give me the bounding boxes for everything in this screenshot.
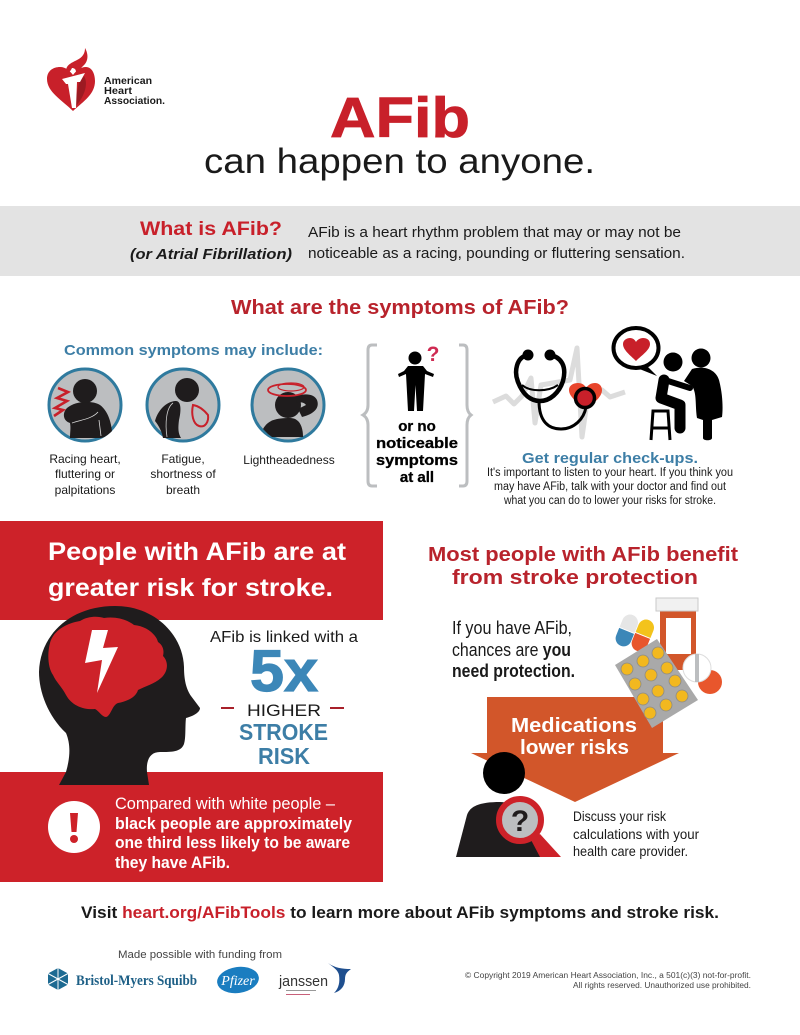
panel: awareness callout: they have AFib. bbox=[115, 853, 230, 872]
copyright: All rights reserved. Unauthorized use prohibited. bbox=[573, 981, 751, 990]
arrow: medications lower risks: Medications bbox=[511, 715, 637, 737]
panel: stroke risk heading bbox=[0, 521, 383, 620]
logo: Pfizer bbox=[215, 964, 261, 996]
heading: symptoms: What are the symptoms of AFib? bbox=[231, 297, 569, 319]
symptom labels: Lightheadedness bbox=[243, 453, 335, 467]
icon: fatigue bbox=[147, 369, 219, 441]
check-ups text: It's important to listen to your heart. If you think you bbox=[487, 467, 733, 479]
symptom labels: palpitations bbox=[55, 483, 115, 497]
panel: no noticeable symptoms: or no bbox=[398, 418, 436, 435]
symptom labels: fluttering or bbox=[55, 467, 115, 481]
symptom labels bbox=[49, 452, 335, 497]
heading: common symptoms: Common symptoms may include: bbox=[64, 342, 323, 359]
icon: person with magnifier bbox=[456, 752, 561, 857]
logo: Bristol-Myers Squibb bbox=[48, 968, 197, 990]
check-ups text: what you can do to lower your risks for stroke. bbox=[503, 495, 716, 507]
panel: what is AFib: (or Atrial Fibrillation) bbox=[130, 246, 292, 263]
stat: 5x higher stroke risk: HIGHER bbox=[247, 701, 321, 720]
panel: awareness callout bbox=[0, 772, 383, 882]
logo: Janssen: janssen bbox=[278, 973, 328, 990]
stat: 5x higher stroke risk: RISK bbox=[258, 743, 310, 769]
panel: what is AFib: AFib is a heart rhythm problem that may or may not be bbox=[308, 224, 681, 241]
panel: what is AFib: What is AFib? bbox=[140, 219, 282, 240]
icon: racing heart bbox=[49, 369, 121, 441]
title bbox=[204, 86, 595, 181]
check-ups text: Get regular check-ups. bbox=[522, 450, 698, 467]
logo: American Heart Association bbox=[47, 48, 165, 111]
heading: stroke protection: Most people with AFib benefit bbox=[428, 544, 738, 566]
stat: 5x higher stroke risk bbox=[210, 629, 358, 769]
icon: stethoscope and heart bbox=[493, 348, 625, 437]
panel: what is AFib bbox=[0, 206, 800, 276]
panel: no noticeable symptoms bbox=[363, 343, 471, 486]
logo: American Heart Association: Heart bbox=[104, 86, 133, 97]
symptom labels: Fatigue, bbox=[161, 452, 205, 466]
icon: lightheadedness bbox=[252, 369, 324, 441]
panel: awareness callout: Compared with white people – bbox=[115, 794, 336, 813]
heading: stroke protection: from stroke protection bbox=[452, 567, 698, 589]
logo: American Heart Association: American bbox=[104, 76, 152, 87]
title: can happen to anyone. bbox=[204, 142, 595, 181]
stat: 5x higher stroke risk: 5x bbox=[250, 639, 318, 704]
check-ups text: may have AFib, talk with your doctor and find out bbox=[494, 481, 727, 493]
heading: stroke protection bbox=[428, 544, 738, 589]
icon: person with magnifier: ? bbox=[511, 805, 529, 838]
arrow: medications lower risks bbox=[471, 697, 679, 802]
panel: stroke risk heading: greater risk for stroke. bbox=[48, 574, 333, 602]
stat: 5x higher stroke risk: AFib is linked with a bbox=[210, 629, 358, 646]
icon: medication bbox=[613, 598, 722, 728]
logo: American Heart Association: Association. bbox=[104, 96, 165, 107]
protection text: If you have AFib, bbox=[452, 618, 572, 638]
title: AFib bbox=[330, 86, 470, 150]
symptom labels: shortness of bbox=[150, 467, 216, 481]
panel: what is AFib: noticeable as a racing, pounding or fluttering sensation. bbox=[308, 245, 685, 262]
symptom labels: Racing heart, bbox=[49, 452, 121, 466]
discuss text bbox=[573, 808, 699, 859]
protection text: chances are you bbox=[452, 640, 571, 660]
protection text bbox=[452, 618, 575, 681]
protection text: need protection. bbox=[452, 661, 575, 681]
copyright bbox=[465, 971, 751, 990]
logo: Bristol-Myers Squibb: Bristol-Myers Squibb bbox=[76, 973, 197, 989]
check-ups text bbox=[487, 450, 733, 507]
symptom labels: breath bbox=[166, 483, 200, 497]
discuss text: health care provider. bbox=[573, 843, 688, 859]
funding note: Made possible with funding from bbox=[118, 949, 282, 961]
copyright: © Copyright 2019 American Heart Association, Inc., a 501(c)(3) not-for-profit. bbox=[465, 971, 751, 980]
logo: Pfizer: Pfizer bbox=[220, 974, 255, 989]
panel: awareness callout: black people are approximately bbox=[115, 814, 353, 833]
discuss text: Discuss your risk bbox=[573, 808, 667, 824]
panel: no noticeable symptoms: noticeable bbox=[376, 435, 458, 452]
panel: no noticeable symptoms: at all bbox=[400, 469, 434, 486]
logo: Janssen bbox=[278, 963, 351, 995]
stat: 5x higher stroke risk: STROKE bbox=[239, 719, 328, 745]
arrow: medications lower risks: lower risks bbox=[520, 737, 629, 759]
panel: no noticeable symptoms: symptoms bbox=[376, 452, 458, 469]
panel: stroke risk heading: People with AFib are at bbox=[48, 538, 347, 566]
call to action: Visit heart.org/AFibTools to learn more about AFib symptoms and stroke risk. bbox=[81, 903, 719, 922]
discuss text: calculations with your bbox=[573, 826, 699, 842]
icon: head with brain and lightning bbox=[39, 606, 200, 785]
panel: no noticeable symptoms: ? bbox=[427, 343, 439, 366]
icon: doctor with patient bbox=[614, 328, 723, 440]
panel: awareness callout: one third less likely to be aware bbox=[115, 833, 350, 852]
